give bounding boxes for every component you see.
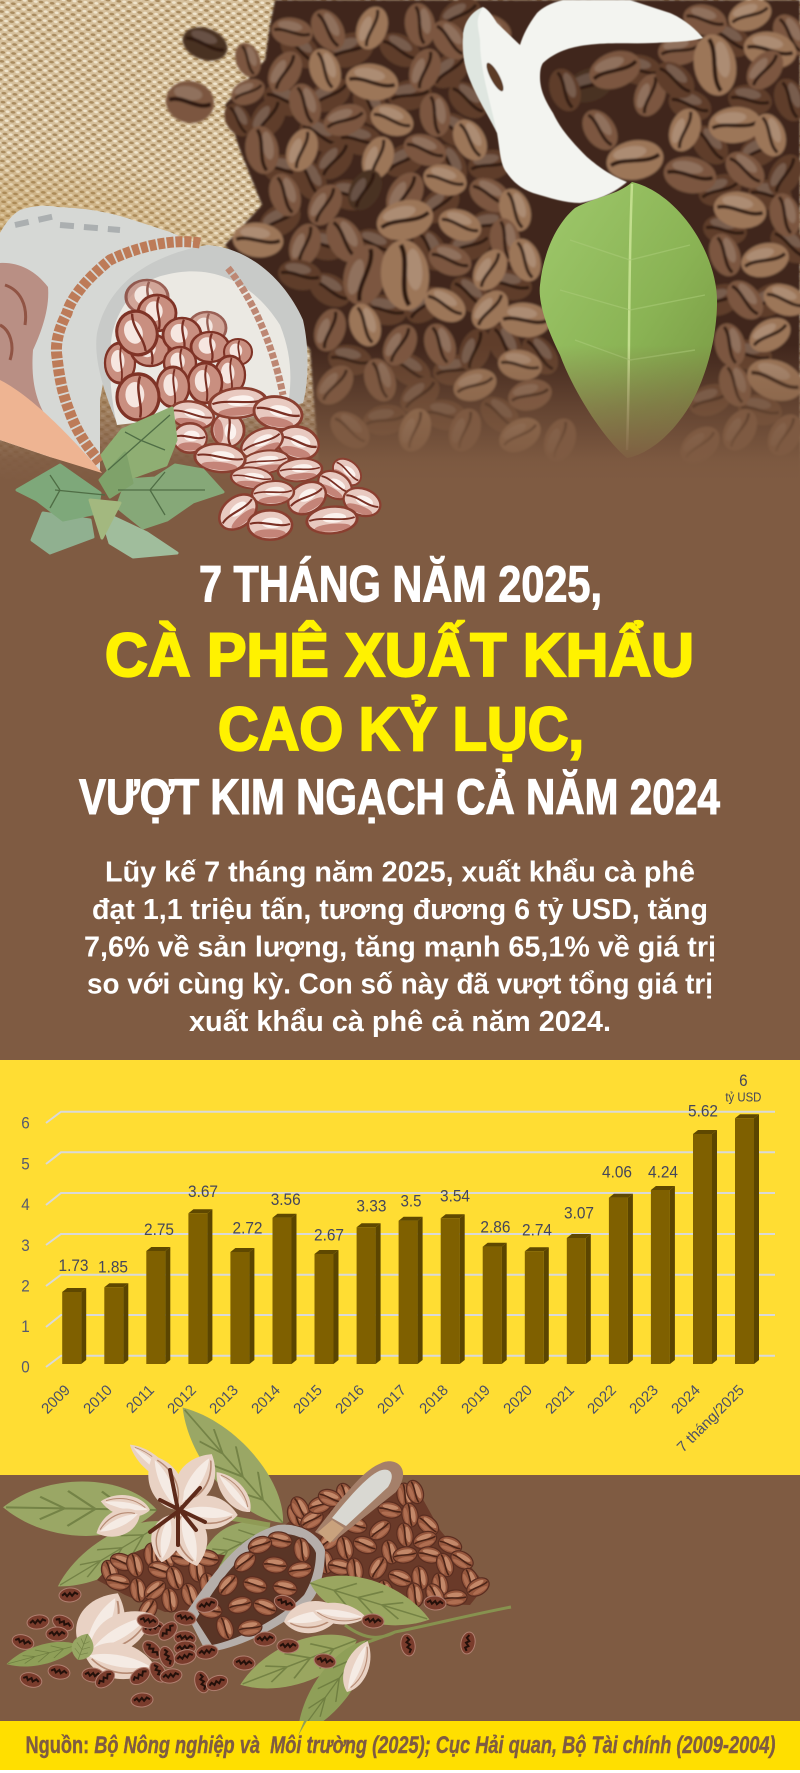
value labels: 3.33 bbox=[356, 1196, 386, 1216]
roasted coffee bean mass bbox=[163, 0, 800, 480]
panel: source footer bbox=[0, 1712, 800, 1773]
x axis labels: 2018 bbox=[416, 1382, 452, 1417]
branch with leaves and buds bbox=[233, 1563, 511, 1746]
value labels: 1.73 bbox=[58, 1256, 88, 1275]
hero photo: coffee beans on burlap bbox=[0, 0, 800, 481]
x axis labels: 2023 bbox=[626, 1382, 662, 1417]
value labels: 1.85 bbox=[98, 1258, 128, 1276]
y axis labels: 6 bbox=[21, 1114, 30, 1132]
left bean pile bbox=[97, 1542, 225, 1624]
x axis labels: 2014 bbox=[248, 1382, 284, 1417]
value labels: 2.75 bbox=[144, 1220, 174, 1239]
scoop bbox=[173, 1461, 403, 1652]
title line 3: CAO KỶ LỤC, bbox=[218, 695, 584, 763]
green leaf bbox=[540, 182, 717, 458]
value labels: 3.67 bbox=[188, 1182, 218, 1201]
x axis labels: 2020 bbox=[500, 1382, 536, 1417]
bottom left flower bbox=[4, 1582, 161, 1685]
white coffee cup bbox=[463, 0, 703, 203]
y axis labels: 2 bbox=[21, 1276, 30, 1296]
scattered coffee beans bbox=[11, 1587, 477, 1708]
summary paragraph: Lũy kế 7 tháng năm 2025, xuất khẩu cà phê bbox=[105, 856, 695, 888]
value labels: 3.56 bbox=[271, 1190, 301, 1209]
spilled beans bbox=[168, 386, 384, 540]
x axis labels: 2017 bbox=[374, 1382, 410, 1417]
value labels: 2.86 bbox=[480, 1218, 510, 1236]
summary paragraph: so với cùng kỳ. Con số này đã vượt tổng giá trị bbox=[87, 968, 713, 1000]
right bean pile bbox=[284, 1478, 492, 1609]
bars bbox=[62, 1114, 759, 1364]
fade into brown bbox=[0, 345, 800, 481]
x axis labels: 2016 bbox=[332, 1382, 368, 1417]
bar chart: coffee export value 2009 to 7 months 2025 bbox=[21, 1071, 775, 1456]
summary paragraph: 7,6% về sản lượng, tăng mạnh 65,1% về giá trị bbox=[84, 932, 716, 964]
jar body bbox=[0, 206, 200, 470]
title bbox=[79, 556, 720, 825]
x axis labels: 2013 bbox=[206, 1382, 242, 1417]
x axis labels: 7 tháng/2025 bbox=[674, 1382, 748, 1456]
value labels: 6 bbox=[739, 1071, 748, 1090]
x axis labels: 2021 bbox=[542, 1382, 578, 1417]
value labels: 5.62 bbox=[688, 1102, 718, 1120]
pink contents left bbox=[0, 263, 55, 430]
burlap sack background bbox=[0, 0, 800, 480]
x axis labels: 2015 bbox=[290, 1382, 326, 1417]
panel: chart background bbox=[0, 1060, 800, 1475]
x axis labels: 2010 bbox=[80, 1382, 116, 1417]
y axis labels: 5 bbox=[21, 1154, 30, 1174]
value labels: tỷ USD bbox=[725, 1090, 761, 1104]
illustration: coffee scoop, beans, flowers and leaves bbox=[3, 1393, 511, 1746]
y axis labels: 4 bbox=[21, 1195, 30, 1214]
summary paragraph bbox=[84, 856, 716, 1038]
scoop body bbox=[186, 1525, 325, 1652]
summary paragraph: đạt 1,1 triệu tấn, tương đương 6 tỷ USD, tăng bbox=[92, 894, 708, 926]
x axis labels: 2022 bbox=[584, 1382, 620, 1417]
value labels: 3.07 bbox=[564, 1204, 594, 1222]
y axis labels: 3 bbox=[21, 1236, 30, 1255]
y axis labels bbox=[21, 1114, 30, 1376]
title line 1: 7 THÁNG NĂM 2025, bbox=[199, 556, 602, 612]
beans inside jar bbox=[105, 280, 252, 420]
olive leaves behind bbox=[3, 1393, 300, 1601]
green leaves cluster bbox=[17, 408, 223, 557]
y axis labels: 0 bbox=[21, 1358, 30, 1376]
value labels: 2.72 bbox=[232, 1218, 262, 1238]
value labels: 4.06 bbox=[602, 1162, 632, 1182]
title line 2: CÀ PHÊ XUẤT KHẨU bbox=[105, 621, 694, 689]
jar mouth bbox=[96, 245, 308, 423]
x axis labels: 2024 bbox=[668, 1382, 704, 1417]
x axis labels: 2019 bbox=[458, 1382, 494, 1417]
rope right bbox=[228, 268, 283, 395]
long leaf tip over footer bbox=[298, 1712, 312, 1736]
summary paragraph: xuất khẩu cà phê cả năm 2024. bbox=[189, 1006, 611, 1038]
value labels bbox=[58, 1071, 761, 1276]
value labels: 3.54 bbox=[440, 1186, 470, 1206]
value labels: 2.74 bbox=[522, 1220, 552, 1240]
flower stamens bbox=[150, 1470, 205, 1545]
value labels: 3.5 bbox=[400, 1192, 422, 1210]
x axis labels bbox=[38, 1382, 748, 1456]
y axis labels: 1 bbox=[21, 1317, 30, 1336]
top flower bbox=[91, 1438, 258, 1571]
scoop handle bbox=[315, 1461, 403, 1542]
rope bbox=[56, 242, 200, 462]
value labels: 2.67 bbox=[314, 1226, 344, 1244]
value labels: 4.24 bbox=[648, 1162, 678, 1182]
illustration: tipped glass jar with beans bbox=[0, 206, 384, 557]
orange cloth bbox=[0, 380, 102, 473]
x axis labels: 2009 bbox=[38, 1382, 74, 1417]
x axis labels: 2011 bbox=[123, 1382, 158, 1417]
x axis labels: 2012 bbox=[164, 1382, 200, 1417]
grid lines bbox=[46, 1112, 775, 1367]
